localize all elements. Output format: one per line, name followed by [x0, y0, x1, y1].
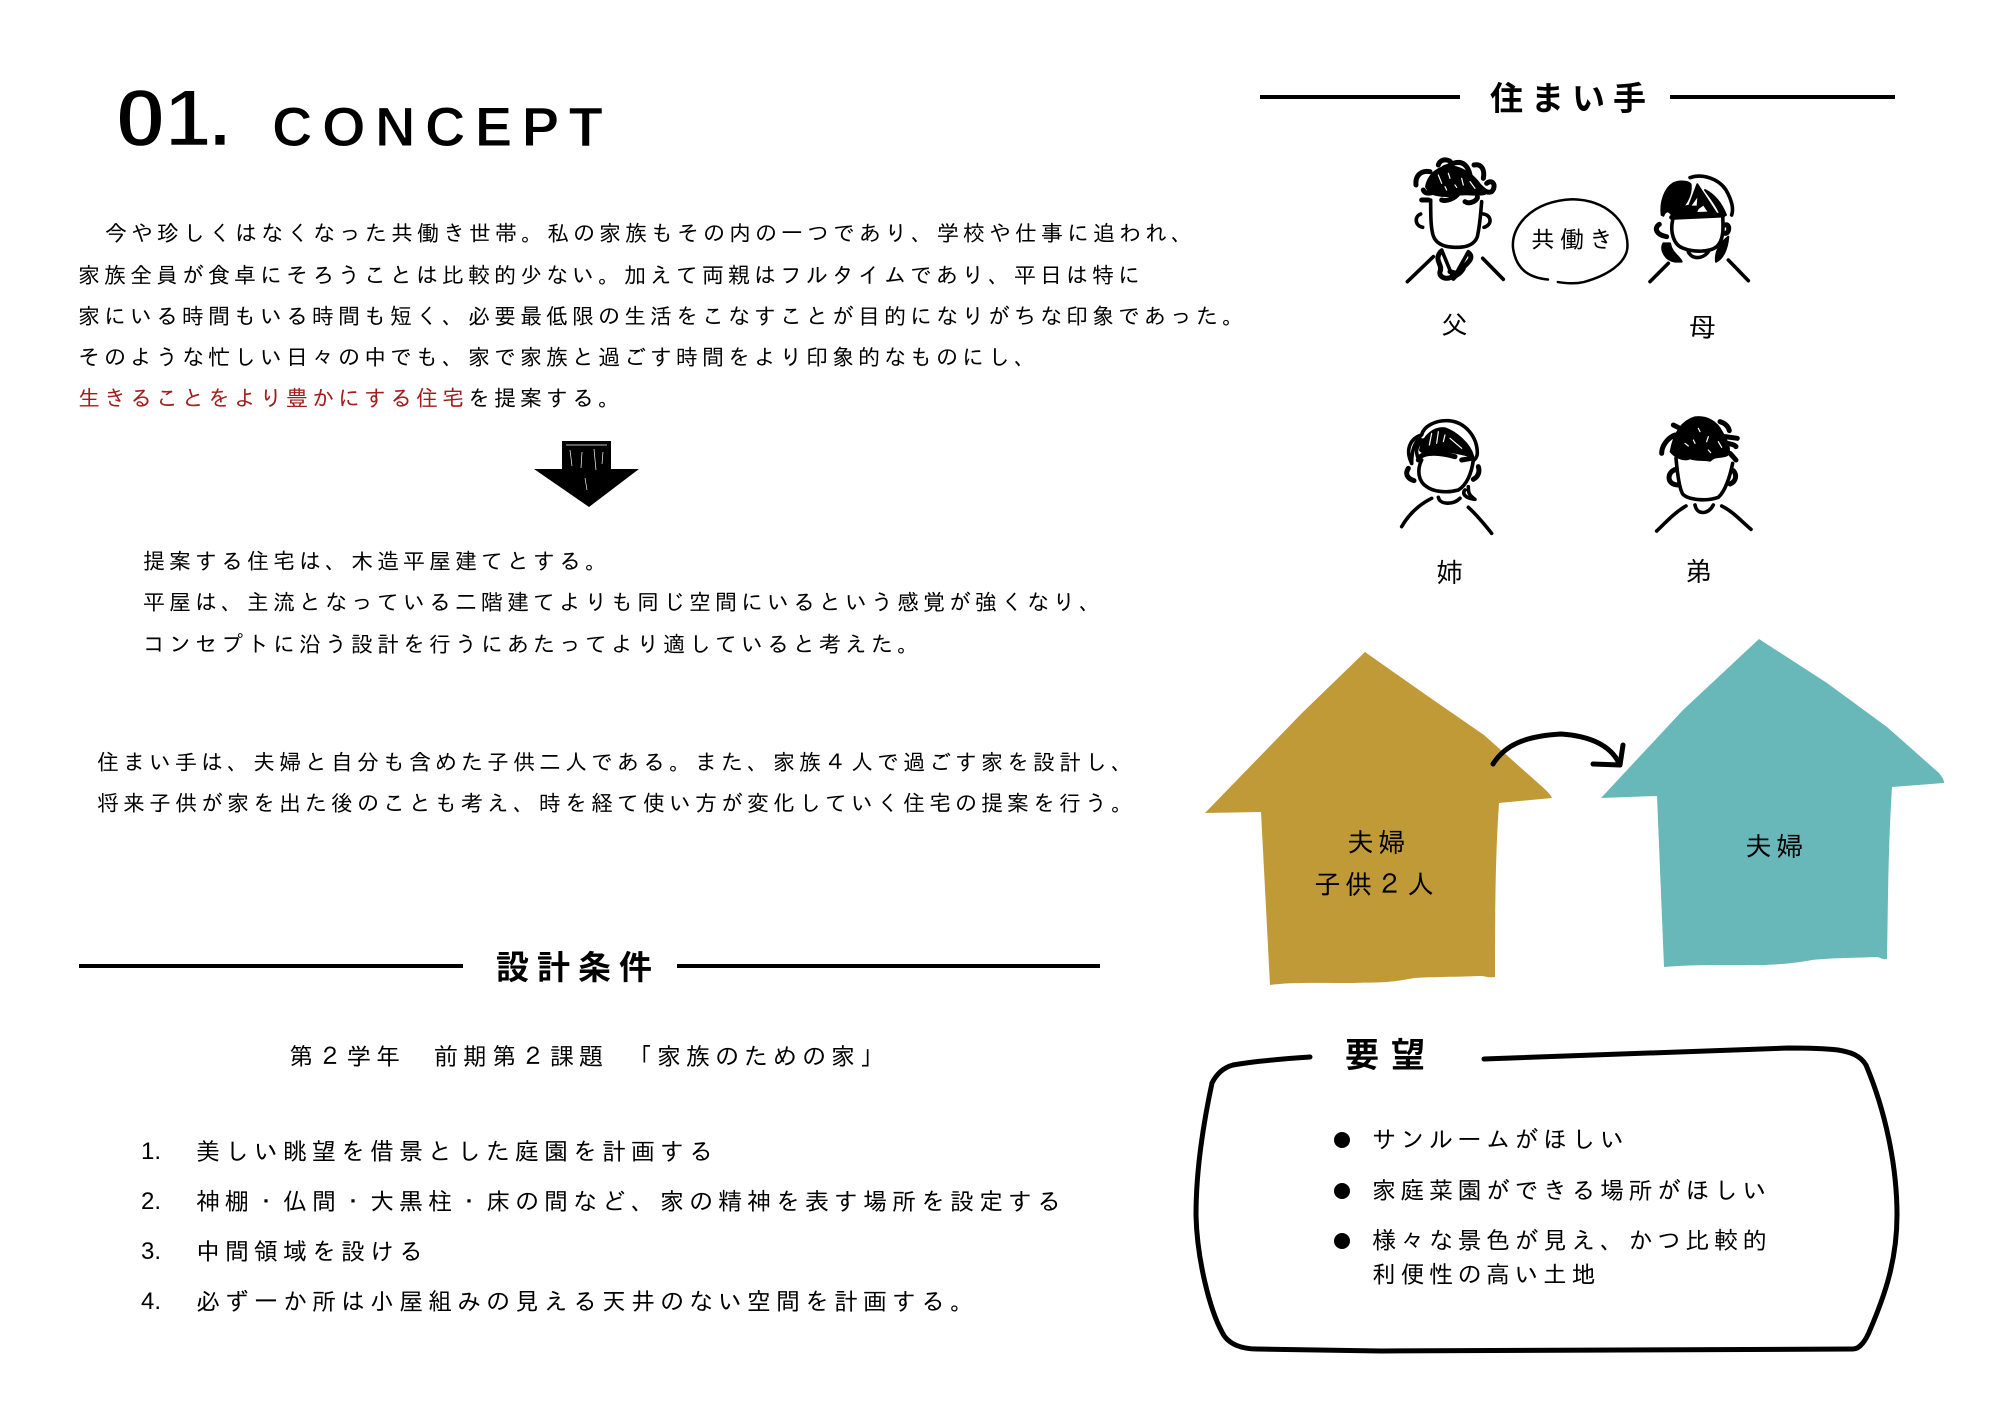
heading: residents — [1260, 80, 1895, 117]
title: CONCEPT — [272, 95, 612, 158]
list: design conditions: 1. — [141, 1138, 161, 1165]
text block: concept introduction: 家族全員が食卓にそろうことは比較的少ない。加えて両親はフルタイムであり、平日は特に — [78, 263, 1144, 288]
text block: residents and future: 住まい手は、夫婦と自分も含めた子供二人である。また、家族４人で過ごす家を設計し、 — [97, 750, 1137, 775]
arrow: family house to couple house — [1493, 734, 1623, 765]
illustration: family house — [1205, 652, 1552, 985]
list: design conditions: 3. — [141, 1238, 161, 1265]
list: design conditions: 4. — [141, 1288, 161, 1315]
icon: down arrow — [534, 441, 639, 507]
text block: residents and future: 将来子供が家を出た後のことも考え、時を経て使い方が変化していく住宅の提案を行う。 — [97, 791, 1137, 816]
title — [115, 73, 612, 164]
illustration: sister — [1402, 421, 1492, 533]
text block: residents and future — [97, 750, 1137, 816]
illustration: couple house: 夫婦 — [1745, 832, 1807, 862]
title: 0 — [115, 73, 166, 164]
title: 1. — [165, 73, 229, 164]
panel: requests: 利便性の高い土地 — [1372, 1262, 1600, 1289]
illustration: mother — [1650, 176, 1748, 282]
heading: residents: 住まい手 — [1490, 80, 1654, 117]
callout: dual income bubble: 共働き — [1531, 227, 1618, 254]
label: mother: 母 — [1689, 313, 1720, 343]
text block: concept introduction: 生きることをより豊かにする住宅を提案する。 — [78, 386, 624, 411]
panel: requests: サンルームがほしい — [1372, 1127, 1628, 1154]
list: design conditions: 2. — [141, 1188, 161, 1215]
heading: design conditions: 設計条件 — [496, 949, 660, 986]
panel: requests: 様々な景色が見え、かつ比較的 — [1372, 1228, 1771, 1255]
text block: assignment name: 「家族のための家」 — [628, 1044, 889, 1071]
panel: requests: 家庭菜園ができる場所がほしい — [1372, 1178, 1771, 1205]
list: design conditions — [141, 1138, 1066, 1316]
panel: requests — [1196, 1037, 1897, 1351]
heading: design conditions — [79, 949, 1100, 986]
text block: concept introduction: そのような忙しい日々の中でも、家で家族と過ごす時間をより印象的なものにし、 — [78, 345, 1040, 370]
list: design conditions: 必ず一か所は小屋組みの見える天井のない空間を計画する。 — [196, 1289, 979, 1316]
callout: dual income bubble — [1513, 199, 1627, 283]
heading: requests: 要望 — [1345, 1037, 1437, 1075]
illustration: brother — [1657, 417, 1751, 531]
label: father: 父 — [1441, 310, 1472, 340]
text block: concept introduction: 家にいる時間もいる時間も短く、必要最低限の生活をこなすことが目的になりがちな印象であった。 — [78, 304, 1248, 329]
illustration: family house: 夫婦 — [1347, 828, 1409, 858]
label: brother: 弟 — [1685, 557, 1716, 587]
text block: proposal: 提案する住宅は、木造平屋建てとする。 — [143, 549, 611, 574]
text block: assignment name: 第２学年 前期第２課題 — [289, 1044, 608, 1071]
illustration: couple house — [1601, 639, 1944, 967]
text block: proposal: コンセプトに沿う設計を行うにあたってより適していると考えた。 — [143, 632, 923, 657]
text block: proposal — [143, 549, 1105, 657]
list: design conditions: 神棚・仏間・大黒柱・床の間など、家の精神を表す場所を設定する — [196, 1189, 1066, 1216]
illustration: family house: 子供２人 — [1314, 870, 1438, 900]
text block: assignment name — [289, 1044, 889, 1071]
list: design conditions: 中間領域を設ける — [196, 1239, 428, 1266]
illustration: father — [1407, 160, 1503, 282]
text block: concept introduction: 今や珍しくはなくなった共働き世帯。私の家族もその内の一つであり、学校や仕事に追われ、 — [105, 221, 1197, 246]
text block: concept introduction — [78, 221, 1248, 411]
label: sister: 姉 — [1436, 558, 1467, 588]
text block: proposal: 平屋は、主流となっている二階建てよりも同じ空間にいるという感覚が強くなり、 — [143, 590, 1105, 615]
list: design conditions: 美しい眺望を借景とした庭園を計画する — [196, 1139, 718, 1166]
